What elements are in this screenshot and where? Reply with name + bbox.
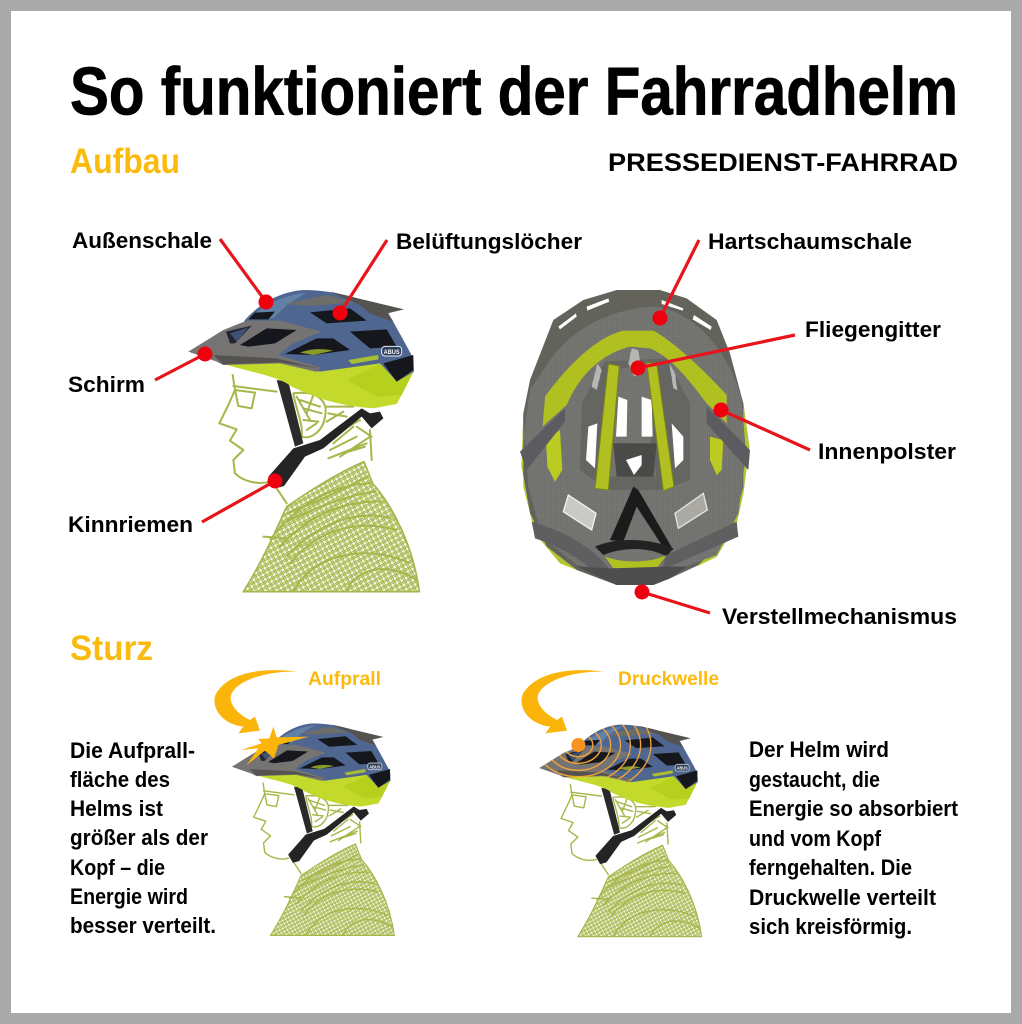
paragraph: pressure wave: Druckwelle verteilt (749, 885, 937, 910)
label: Schirm (68, 346, 212, 397)
foam shell (524, 307, 746, 578)
label: Belüftungslöcher (332, 229, 582, 320)
label: Verstellmechanismus (634, 584, 957, 629)
paragraph: impact: fläche des (70, 767, 170, 792)
bar pads (595, 363, 674, 491)
paragraph: impact: größer als der (70, 825, 208, 850)
pad horseshoe (543, 331, 727, 427)
label: Außenschale: Außenschale (72, 228, 212, 253)
publisher: PRESSEDIENST-FAHRRAD (608, 149, 958, 177)
centre ribs (580, 358, 690, 490)
paragraph: impact: Helms ist (70, 796, 164, 821)
illustration: helmet side view with head: ABUS (384, 349, 400, 356)
adjuster bands (532, 522, 738, 578)
outer shell (522, 290, 749, 585)
icon: impact star (241, 727, 309, 765)
side straps (520, 407, 750, 470)
label: Innenpolster (714, 402, 956, 464)
paragraph: pressure wave: Energie so absorbiert (749, 796, 959, 821)
paragraph: impact: Energie wird (70, 884, 188, 909)
illustration: helmet seen from below (520, 290, 750, 585)
illustration: impact helmet: ABUS (369, 764, 380, 769)
label: Verstellmechanismus: Verstellmechanismus (722, 604, 957, 629)
label: Innenpolster: Innenpolster (818, 439, 956, 464)
label: Außenschale (72, 228, 274, 310)
white openings (586, 397, 683, 468)
label: Fliegengitter (630, 317, 941, 376)
labels (563, 495, 596, 530)
paragraph: pressure wave: ferngehalten. Die (749, 855, 912, 880)
paragraph: pressure wave: Der Helm wird (749, 737, 889, 762)
paragraph: pressure wave: sich kreisförmig. (749, 914, 912, 939)
label: Druckwelle: Druckwelle (618, 669, 719, 690)
lower lime pad (605, 555, 667, 568)
label: Aufprall: Aufprall (308, 669, 381, 690)
heading: Sturz: Sturz (70, 629, 153, 668)
label: Kinnriemen (68, 474, 282, 537)
illustration: pressure wave helmet: ABUS (676, 766, 688, 771)
illustration: helmet side view with head (188, 290, 419, 592)
arrow: pressure wave (521, 670, 604, 733)
chin strap (610, 487, 673, 550)
rear vent slots (558, 298, 712, 330)
paragraph: impact: Kopf – die (70, 855, 165, 880)
pressure rings (544, 724, 652, 782)
illustration: impact helmet (232, 723, 394, 935)
paragraph: impact (70, 738, 216, 938)
label: Belüftungslöcher: Belüftungslöcher (396, 229, 582, 254)
arrow: impact (214, 670, 297, 733)
paragraph: impact: Die Aufprall- (70, 738, 195, 763)
heading: Aufbau: Aufbau (70, 142, 180, 181)
illustration: pressure wave helmet (539, 724, 702, 938)
label: Schirm: Schirm (68, 372, 145, 397)
paragraph: pressure wave: gestaucht, die (749, 767, 880, 792)
paragraph: impact: besser verteilt. (70, 913, 216, 938)
fly mesh (592, 348, 677, 390)
paragraph: pressure wave (749, 737, 959, 939)
label: Hartschaumschale: Hartschaumschale (708, 229, 912, 254)
label: Fliegengitter: Fliegengitter (805, 317, 941, 342)
label: Hartschaumschale (652, 229, 912, 326)
label: Kinnriemen: Kinnriemen (68, 512, 193, 537)
paragraph: pressure wave: und vom Kopf (749, 826, 882, 851)
